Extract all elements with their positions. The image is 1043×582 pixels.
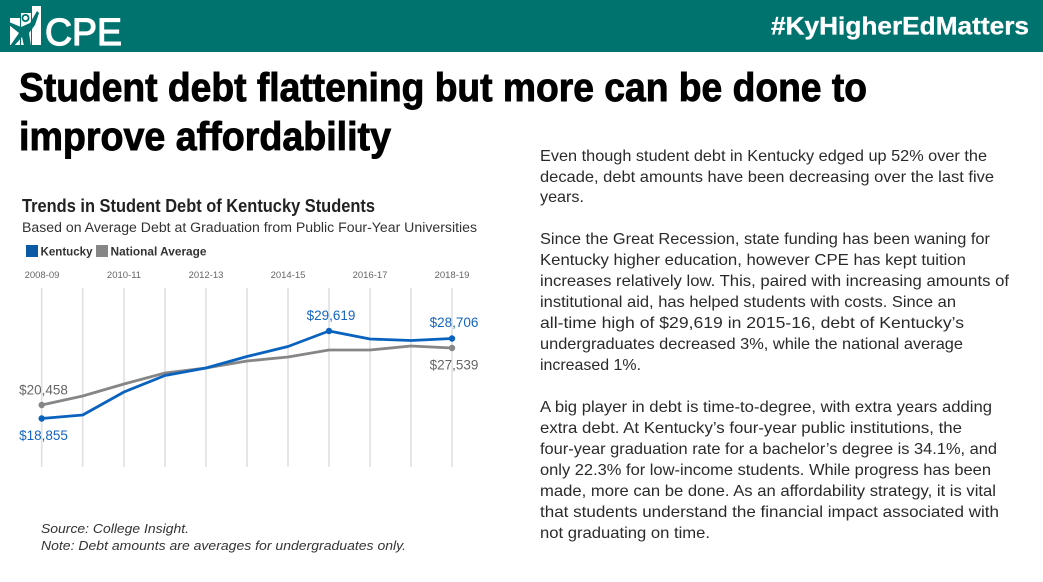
- x-axis year labels: 2012-13: [189, 270, 223, 281]
- paragraph 3: not graduating on time.: [540, 525, 710, 542]
- paragraph 3: [540, 399, 999, 542]
- data labels: $27,539: [430, 358, 478, 372]
- source note: Note: Debt amounts are averages for undergraduates only.: [41, 538, 406, 553]
- paragraph 1: years.: [540, 189, 584, 206]
- series: national average: [38, 345, 455, 408]
- paragraph 1: [540, 148, 994, 206]
- paragraph 2: increases relatively low. This, paired with increasing amounts of: [540, 273, 1010, 290]
- body text: [540, 148, 1010, 542]
- paragraph 3: only 22.3% for low-income students. While progress has been: [540, 462, 991, 479]
- chart heading: [22, 196, 477, 235]
- source note: [41, 521, 406, 553]
- chart heading: Based on Average Debt at Graduation from Public Four-Year Universities: [22, 220, 477, 235]
- x-axis year labels: 2016-17: [353, 270, 387, 281]
- data labels: $29,619: [307, 308, 355, 323]
- title: [19, 66, 867, 159]
- x-axis year labels: 2014-15: [271, 270, 305, 281]
- x-axis year labels: 2010-11: [107, 270, 141, 281]
- paragraph 2: all-time high of $29,619 in 2015-16, debt of Kentucky’s: [540, 315, 964, 332]
- title: Student debt flattening but more can be done to: [19, 66, 867, 110]
- paragraph 2: Since the Great Recession, state funding has been waning for: [540, 231, 991, 248]
- x-axis year labels: 2008-09: [25, 270, 59, 281]
- source note: Source: College Insight.: [41, 521, 189, 536]
- hashtag: #KyHigherEdMatters: [771, 12, 1029, 40]
- paragraph 3: A big player in debt is time-to-degree, with extra years adding: [540, 399, 992, 416]
- paragraph 2: [540, 231, 1010, 374]
- paragraph 2: undergraduates decreased 3%, while the national average: [540, 336, 963, 353]
- series: Kentucky: [38, 328, 455, 422]
- line chart: [19, 270, 478, 467]
- header banner: [0, 0, 1043, 54]
- logo wordmark: CPE: [45, 12, 122, 54]
- paragraph 2: increased 1%.: [540, 357, 641, 374]
- paragraph 2: Kentucky higher education, however CPE has kept tuition: [540, 252, 966, 269]
- chart legend: [26, 244, 207, 258]
- icon: CPE logo mark: [9, 6, 41, 46]
- data labels: $20,458: [19, 382, 68, 398]
- chart legend: National Average: [110, 244, 207, 258]
- chart legend: Kentucky: [40, 244, 93, 258]
- paragraph 1: decade, debt amounts have been decreasing over the last five: [540, 169, 994, 186]
- paragraph 3: extra debt. At Kentucky’s four-year public institutions, the: [540, 420, 962, 437]
- paragraph 3: made, more can be done. As an affordability strategy, it is vital: [540, 483, 996, 500]
- x-axis year labels: [25, 270, 469, 281]
- chart heading: Trends in Student Debt of Kentucky Students: [22, 196, 375, 216]
- paragraph 3: four-year graduation rate for a bachelor’s degree is 34.1%, and: [540, 441, 997, 458]
- data labels: $18,855: [19, 428, 68, 443]
- x-axis year labels: 2018-19: [435, 270, 469, 281]
- paragraph 3: that students understand the financial impact associated with: [540, 504, 999, 521]
- data labels: [19, 308, 478, 443]
- data labels: $28,706: [430, 315, 478, 330]
- paragraph 1: Even though student debt in Kentucky edged up 52% over the: [540, 148, 987, 165]
- title: improve affordability: [19, 115, 392, 159]
- paragraph 2: institutional aid, has helped students with costs. Since an: [540, 294, 956, 311]
